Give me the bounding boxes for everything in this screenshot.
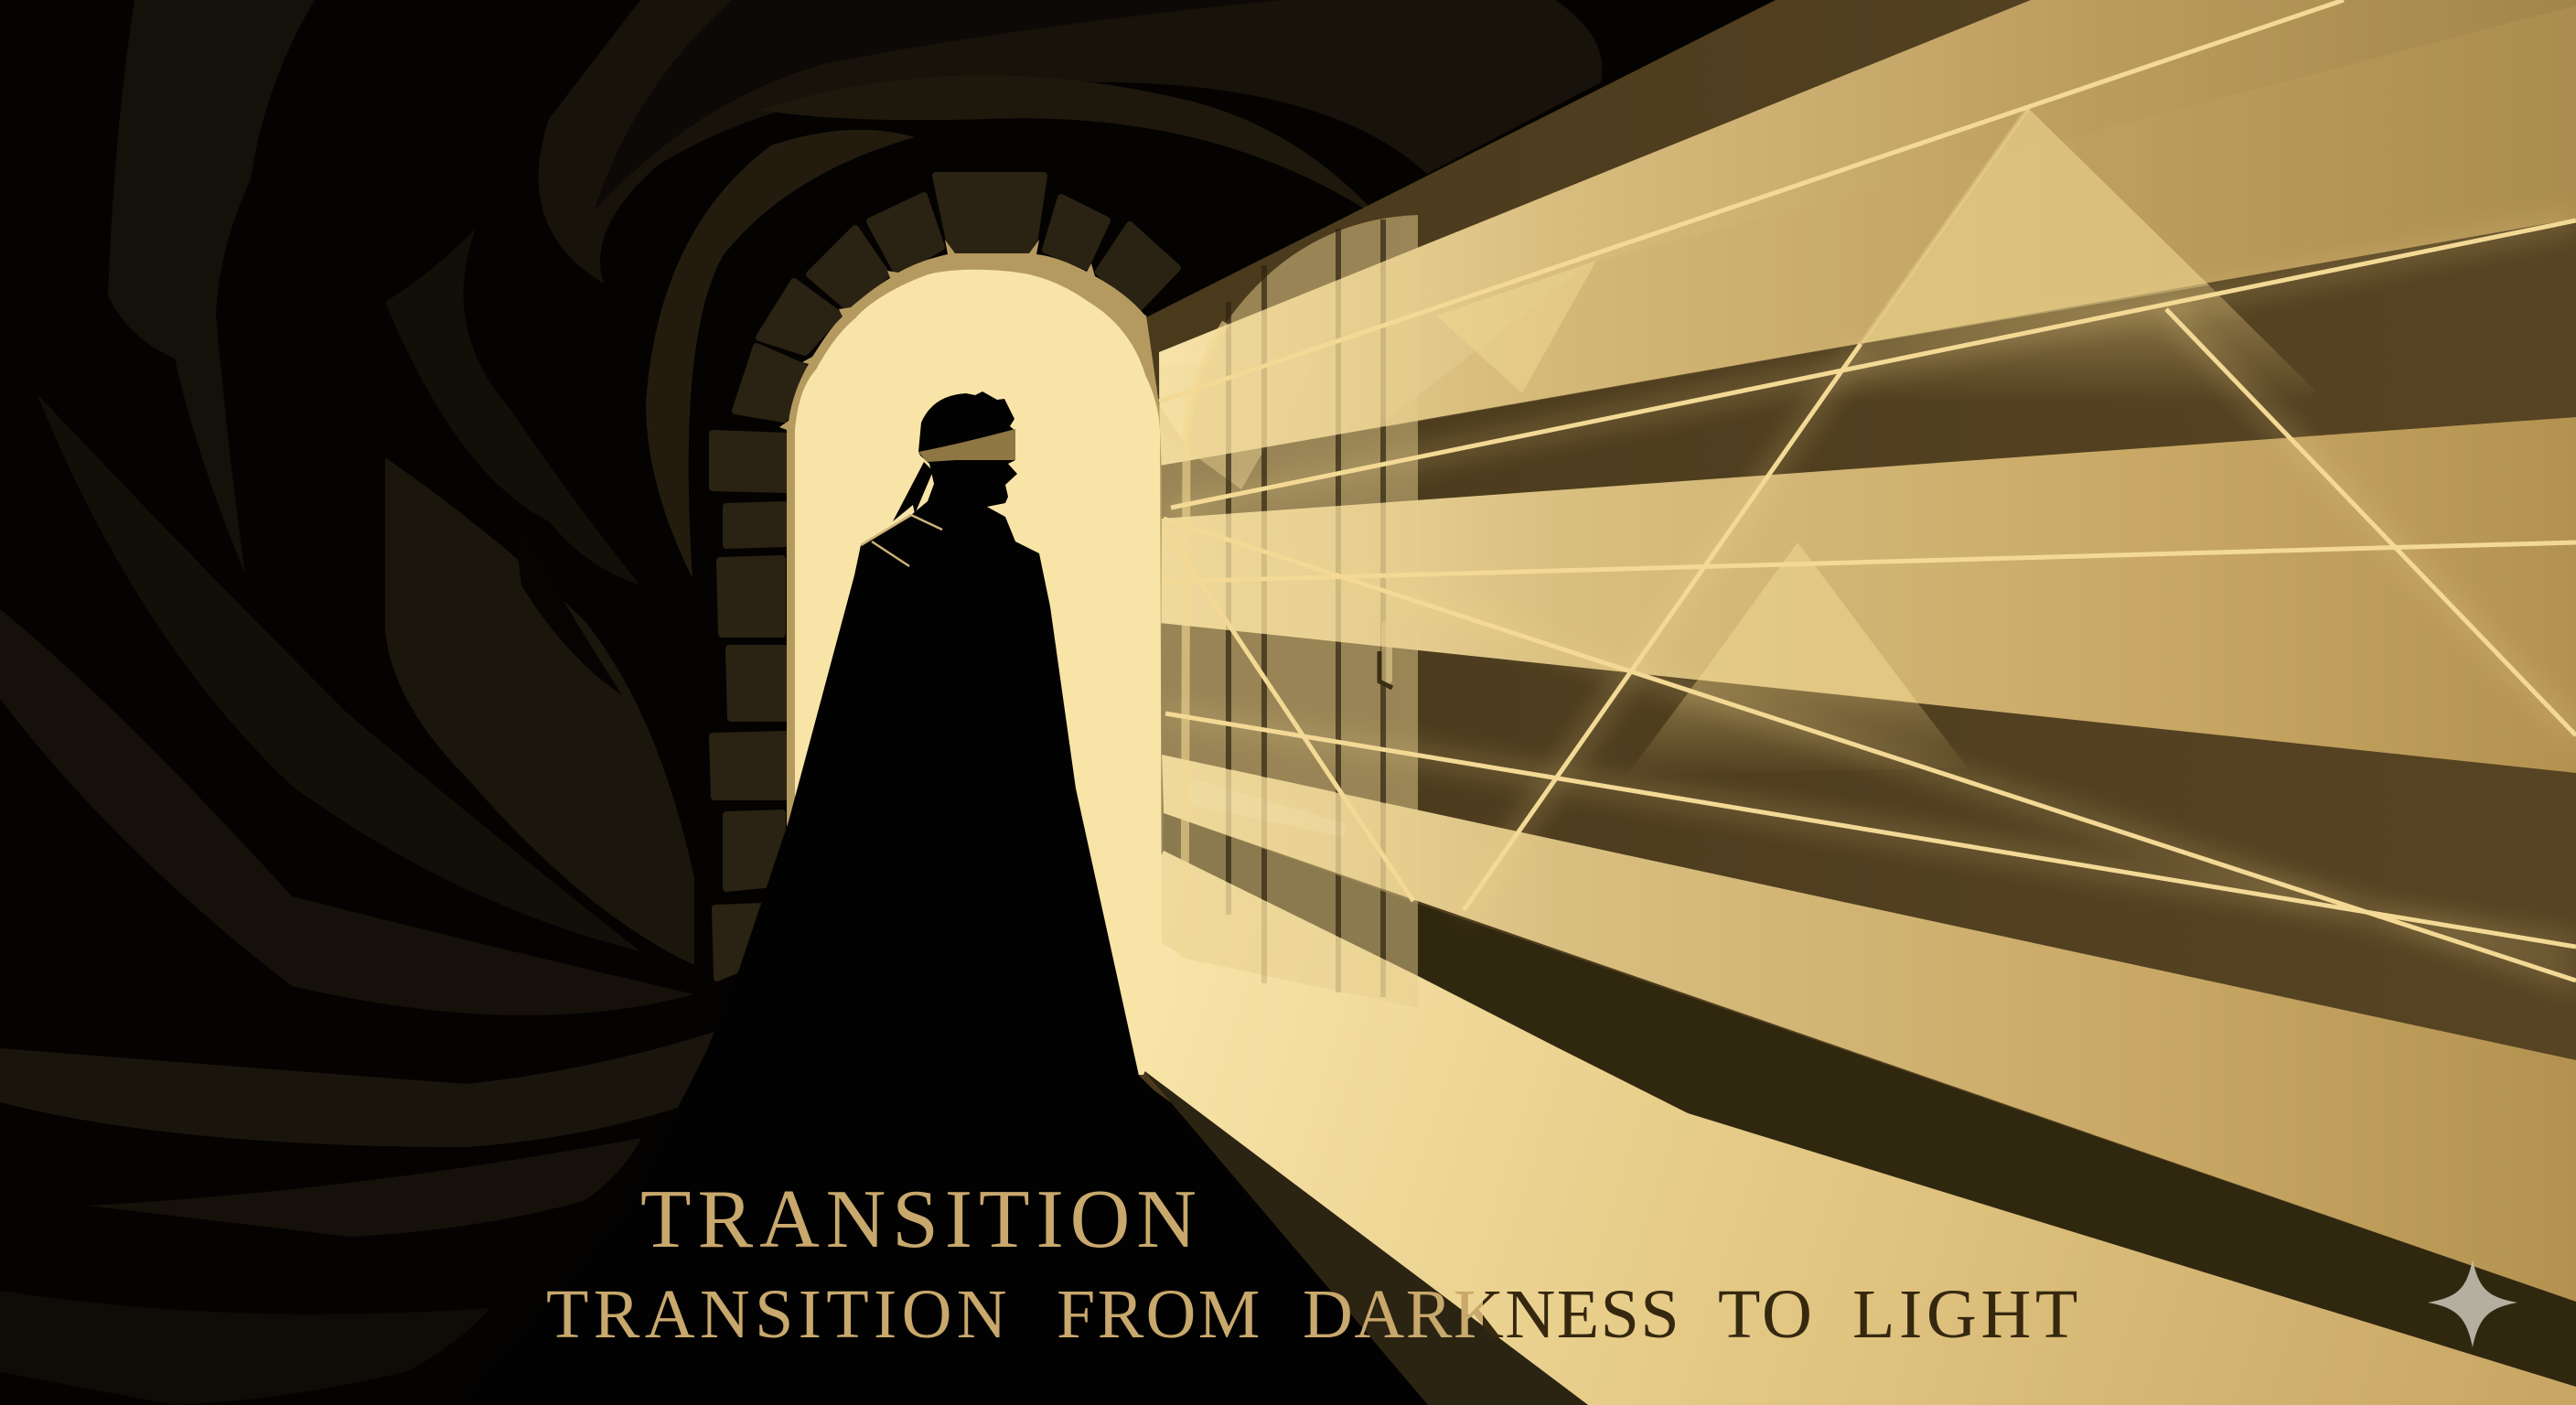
pyramids [1159,108,2315,776]
collar highlights [861,515,942,566]
subtitle: TRANSITION [546,1276,1012,1353]
blindfold tails [893,462,933,521]
light rays [1159,0,2576,981]
floor [1134,851,2576,1405]
stone arch [713,176,1177,978]
shadow band [1164,813,2576,1387]
arch light opening [795,270,1175,1075]
light wall wedge [1139,0,2576,1405]
subtitle: TO [1718,1276,1815,1353]
light beams [1159,0,2576,1302]
translucent door [1160,215,1418,1008]
dark floor edge [1143,1070,1588,1405]
subtitle: LIGHT [1852,1276,2082,1353]
subtitle: DARKNESS [1303,1276,1680,1353]
dark swirl around the tunnel [0,0,1602,1405]
icon: sparkle [2428,1260,2517,1347]
door handle [1379,620,1392,688]
light ray glow [1164,220,2576,981]
arch rim [779,240,1162,1070]
figure silhouette [457,391,1428,1405]
blindfold [918,429,1015,462]
title: TRANSITION [640,1173,1197,1265]
subtitle: FROM [1057,1276,1262,1353]
